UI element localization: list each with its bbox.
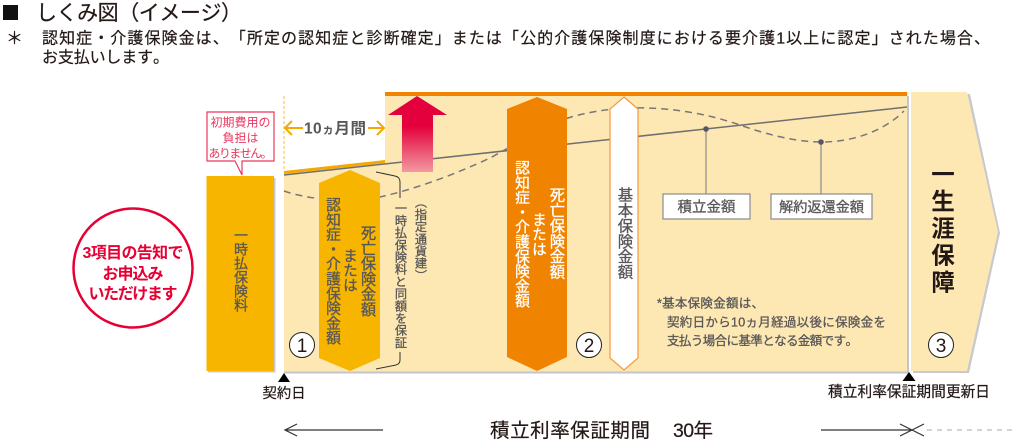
marker: guarantee period renewal date	[828, 372, 990, 400]
marker: guarantee period renewal date: 積立利率保証期間更新日	[828, 384, 990, 400]
pillar 2: death or dementia benefit: 認知症・介護保険金額	[513, 160, 529, 308]
guarantee period timeline: 30年	[673, 420, 713, 442]
marker: contract date	[262, 373, 306, 402]
panel: lifetime coverage: 一生涯保障	[928, 162, 955, 297]
callout: no initial cost: 初期費用の	[210, 114, 270, 130]
guarantee bracket note: 一時払保険料と同額を保証	[393, 202, 407, 348]
guarantee bracket note	[376, 172, 427, 369]
circled number 2	[576, 332, 602, 358]
badge: 3 item notification: いただけます	[88, 285, 178, 303]
footnote: basic insured amount: 契約日から10ヵ月経過以後に保険金を	[667, 314, 886, 330]
label: surrender value: 解約返還金額	[779, 199, 864, 216]
guarantee period timeline	[285, 420, 1012, 442]
guarantee bracket note: （指定通貨建）	[413, 196, 427, 281]
circled number 1	[290, 332, 314, 358]
callout: no initial cost: 負担は	[222, 131, 259, 145]
guarantee period timeline: 積立利率保証期間	[490, 420, 650, 442]
circled number 2: 2	[584, 336, 594, 357]
pillar 2: death or dementia benefit: 死亡保険金額	[548, 187, 565, 280]
label: accumulated amount	[663, 126, 750, 219]
footnote: basic insured amount: 支払う場合に基準となる金額です。	[667, 333, 858, 348]
badge: 3 item notification: 3項目の告知で	[82, 243, 184, 262]
red up arrow	[388, 96, 447, 172]
pillar: basic insured amount	[610, 97, 638, 370]
badge: 3 item notification	[74, 208, 192, 328]
panel: lifetime coverage	[911, 92, 1000, 373]
note text: お支払いします。	[42, 48, 169, 66]
label: accumulated amount: 積立金額	[678, 199, 736, 216]
accumulated amount line	[284, 107, 907, 175]
circled number 3	[928, 332, 954, 358]
panel: main period background	[284, 92, 908, 373]
10 month period label: 10ヵ月間	[304, 120, 366, 138]
panel: lump-sum premium: 一時払保険料	[233, 228, 249, 312]
footnote: basic insured amount	[657, 296, 886, 348]
circled number 3: 3	[936, 336, 946, 357]
pillar 1: death or dementia benefit: 死亡保険金額	[358, 225, 376, 317]
title: しくみ図（イメージ）	[36, 2, 242, 25]
badge: 3 item notification: お申込み	[102, 265, 164, 283]
callout: no initial cost: ありません。	[208, 146, 272, 160]
pillar 2: death or dementia benefit: または	[530, 212, 546, 256]
panel: lump-sum premium	[206, 176, 276, 372]
surrender value dashed curve	[284, 108, 904, 200]
note text: 認知症・介護保険金は、「所定の認知症と診断確定」または「公的介護保険制度における要介護1以上に認定」された場合、	[42, 30, 990, 48]
callout: no initial cost	[207, 112, 274, 175]
note text	[6, 29, 990, 66]
pillar 1: death or dementia benefit	[319, 170, 380, 371]
10 month period label	[285, 120, 384, 138]
footnote: basic insured amount: *基本保険金額は、	[657, 296, 764, 310]
note text: ＊	[6, 29, 23, 48]
label: surrender value	[771, 139, 872, 219]
marker: contract date: 契約日	[262, 385, 306, 402]
pillar 1: death or dementia benefit: または	[341, 248, 357, 292]
pillar 2: death or dementia benefit	[507, 97, 567, 371]
pillar 1: death or dementia benefit: 認知症・介護保険金額	[324, 197, 340, 345]
circled number 1: 1	[297, 336, 307, 357]
pillar: basic insured amount: 基本保険金額	[616, 187, 633, 280]
